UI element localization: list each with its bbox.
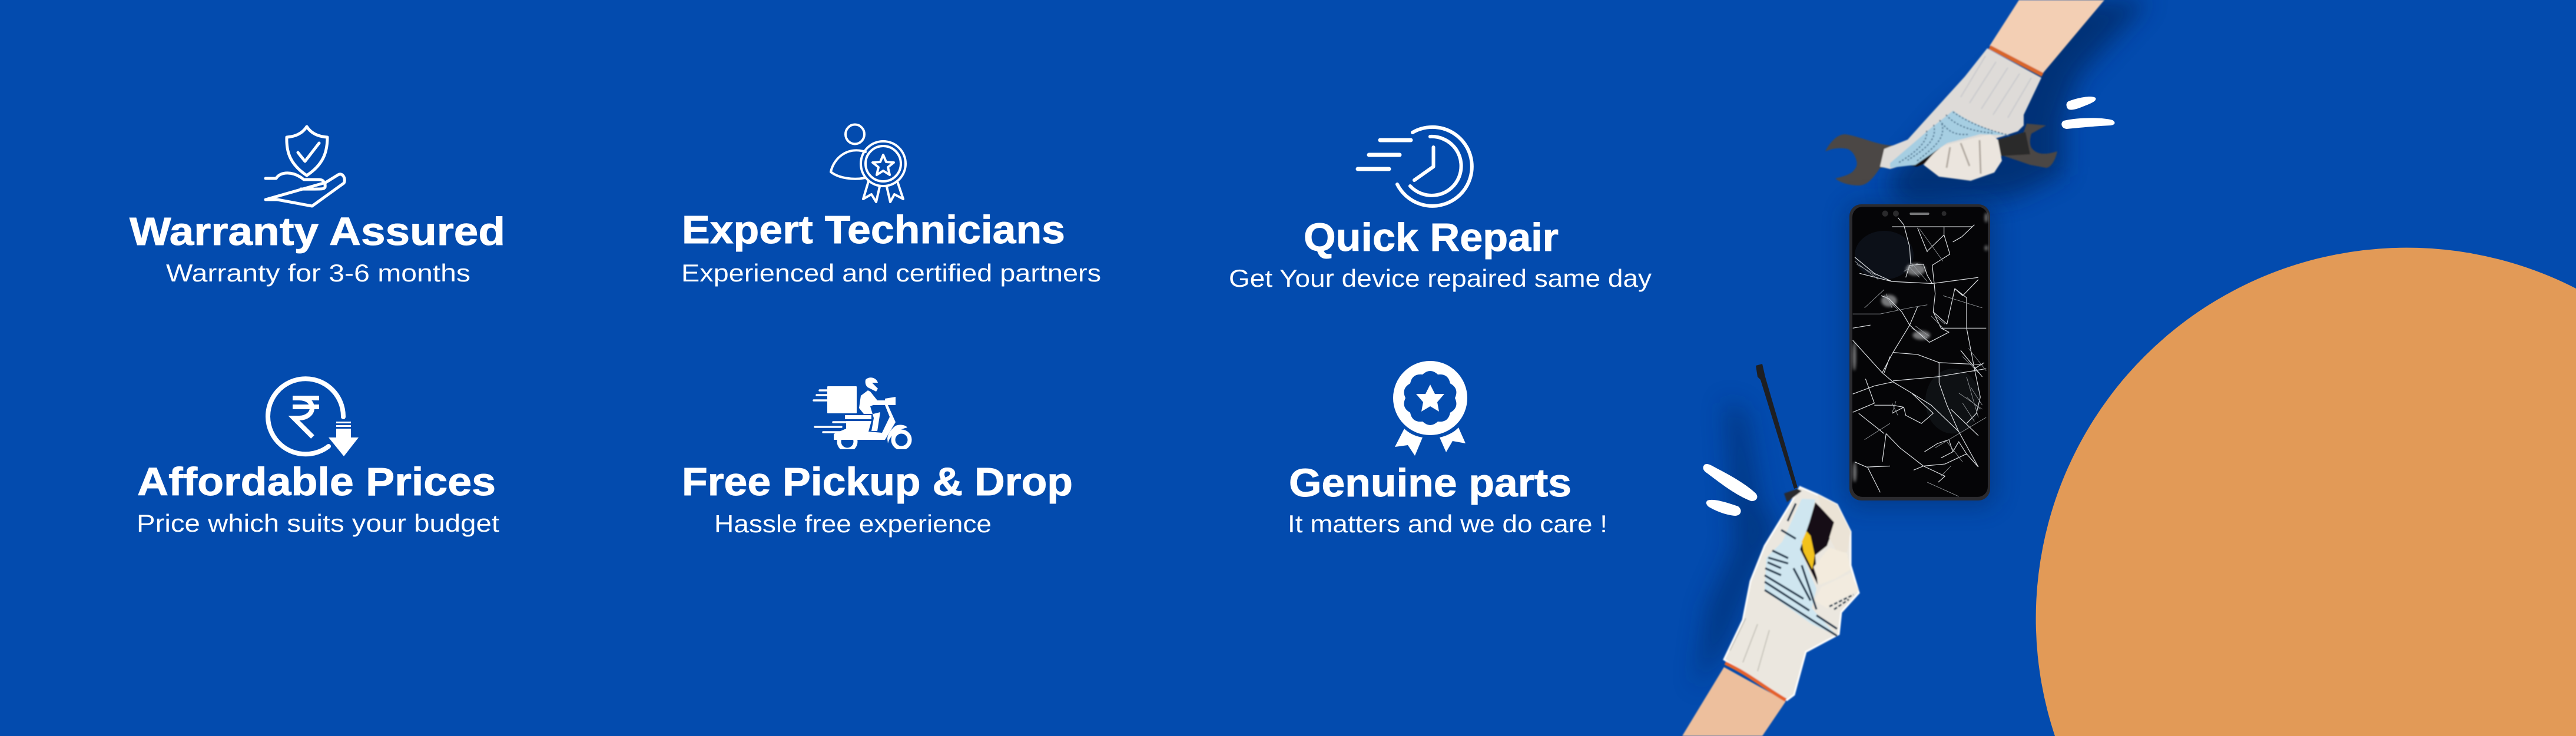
description: Get Your device repaired same day [1229,264,1652,292]
heading: Free Pickup & Drop [682,460,1073,504]
forearm [1682,667,1786,736]
knuckles [1818,495,1851,552]
description: Hassle free experience [714,510,992,538]
glove dotted grip [1890,111,2010,168]
orange circle [2036,248,2576,736]
orange cuff edge [1725,663,1786,700]
description: It matters and we do care ! [1288,510,1607,538]
motion dashes [2067,97,2096,110]
description: Price which suits your budget [137,509,499,537]
bright shatter patches [1852,213,1988,482]
panel: genuine parts [1288,361,1607,538]
icon: rosette badge [1393,361,1467,456]
photo: gloved hand with screwdriver [1682,364,1859,736]
camera and speaker [1882,211,1947,217]
screwdriver collar [1784,489,1802,502]
icon: fast clock [1358,127,1472,206]
orange cuff edge [1990,47,2043,75]
heading: Quick Repair [1304,216,1559,260]
heading: Expert Technicians [682,208,1065,252]
panel: affordable prices [137,379,499,537]
gripping fingers [1924,134,2002,181]
dark grip shadow [1800,502,1835,585]
glove [1724,487,1859,700]
glove cuff lines [1730,618,1769,671]
motion dashes [1703,464,1757,501]
heading: Affordable Prices [137,460,496,504]
glove striped grip [1765,499,1837,636]
panel: free pickup and drop [682,377,1073,538]
photo: cracked phone [1846,203,1996,506]
black gap [1908,146,1944,167]
heading: Warranty Assured [130,210,505,254]
glove cuff ribbing [1961,56,2031,118]
screen with cracks [1852,207,1988,497]
phone shadow [1846,203,1996,506]
panel: expert technicians [681,125,1101,287]
description: Experienced and certified partners [681,259,1101,287]
screwdriver shaft [1756,364,1798,489]
glove [1880,48,2041,169]
wrench [1825,124,2057,185]
description: Warranty for 3-6 months [166,259,470,287]
panel: warranty assured [130,127,505,287]
icon: rupee price drop [268,379,359,456]
panel: quick repair [1229,127,1652,292]
crack lines [1853,218,1986,492]
icon: technician with medal [831,125,906,202]
hand shadow [1884,0,2149,206]
hand shadow [1696,400,1778,689]
icon: shield in hand [266,127,344,206]
photo: gloved hand with wrench [1825,0,2149,206]
heading: Genuine parts [1289,461,1572,505]
yellow screwdriver handle [1802,531,1815,569]
forearm [1990,0,2104,74]
phone body [1849,204,1990,500]
icon: delivery scooter [814,377,910,450]
